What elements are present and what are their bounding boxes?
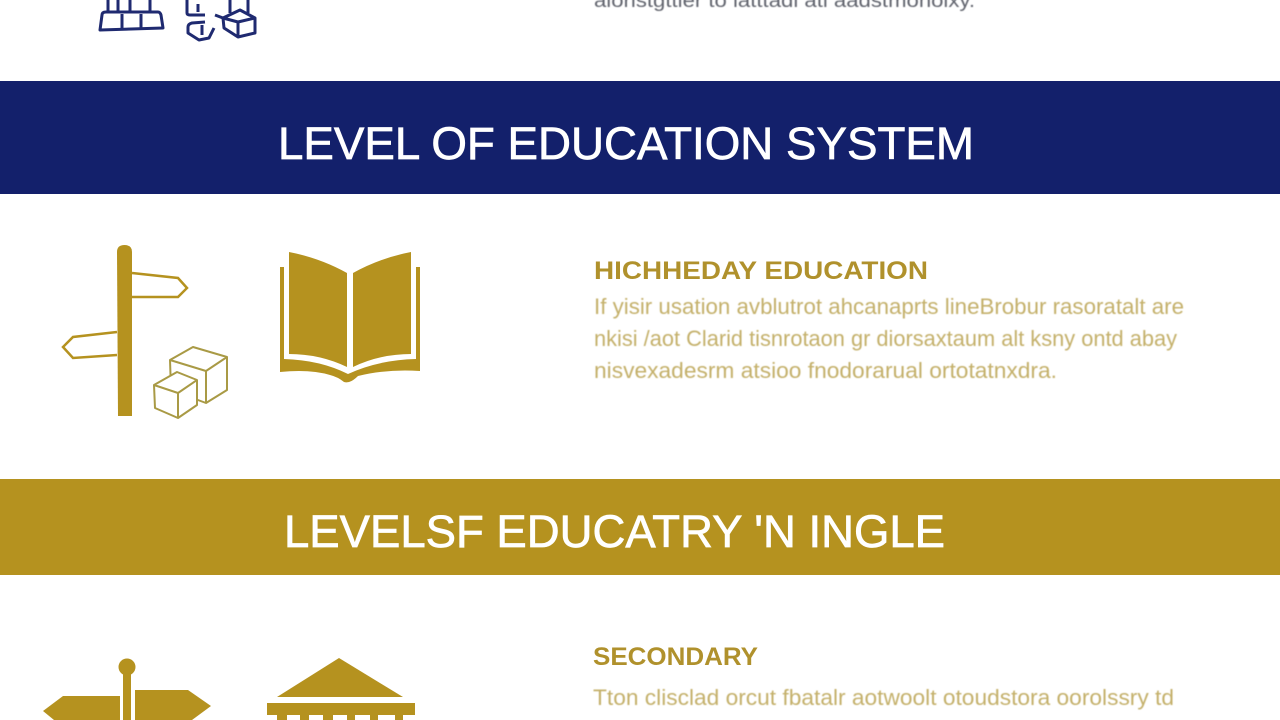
body text: higher education: nkisi /aot Clarid tisnrotaon gr diorsaxtaum alt ksny ontd abay: [594, 326, 1177, 351]
icon: navy building blocks: [100, 0, 255, 40]
section heading: higher education: HICHHEDAY EDUCATION: [594, 257, 928, 285]
icon: open book: [280, 252, 420, 382]
gold banner: LEVELSF EDUCATRY 'N INGLE: [284, 506, 945, 557]
body text: higher education: If yisir usation avblutrot ahcanaprts lineBrobur rasoratalt are: [594, 294, 1184, 319]
icon: institution building: [267, 658, 415, 720]
icon: direction signpost: [43, 658, 211, 720]
navy banner: LEVEL OF EDUCATION SYSTEM: [278, 118, 974, 169]
body text: higher education: nisvexadesrm atsioo fnodorarual ortotatnxdra.: [594, 358, 1057, 383]
body text: secondary: Tton clisclad orcut fbatalr aotwoolt otoudstora oorolssry td: [593, 685, 1174, 710]
icon: signpost with cubes: [63, 245, 227, 418]
navy banner: [0, 81, 1280, 194]
section heading: secondary: SECONDARY: [593, 643, 758, 671]
gold banner: [0, 479, 1280, 575]
body text: higher education: [594, 294, 1184, 383]
